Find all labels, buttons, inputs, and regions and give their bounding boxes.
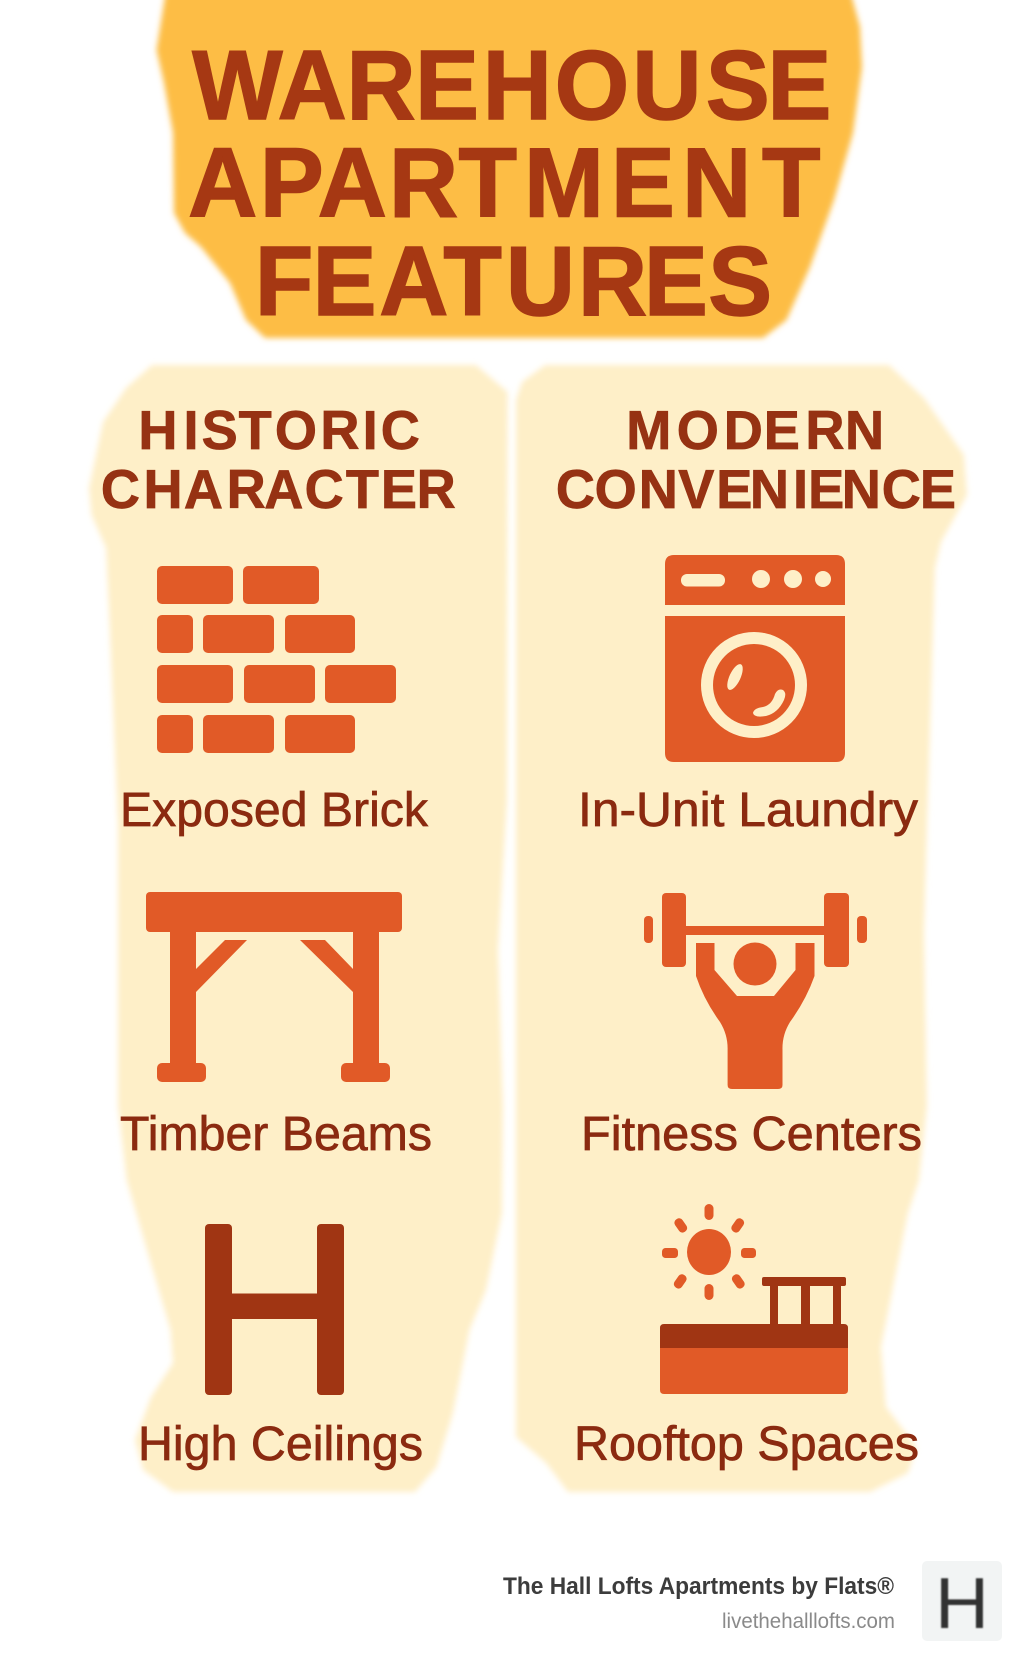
- icon: timber beams: [146, 892, 402, 1082]
- footer brand name: The Hall Lofts Apartments by Flats®: [503, 1573, 894, 1600]
- heading: modern convenience: MODERN: [626, 400, 884, 461]
- heading: historic character: CHARACTER: [101, 459, 456, 520]
- title text: APARTMENT: [188, 127, 820, 238]
- heading: modern convenience: CONVENIENCE: [556, 459, 956, 520]
- footer url: livethehalllofts.com: [722, 1610, 895, 1633]
- icon: brick wall: [157, 566, 396, 753]
- label: fitness centers: Fitness Centers: [581, 1108, 922, 1161]
- footer logo: [922, 1561, 1002, 1644]
- icon: fitness: [644, 893, 867, 1089]
- panel background left: [89, 365, 508, 1492]
- footer logo: H: [935, 1564, 989, 1644]
- label: timber beams: Timber Beams: [120, 1108, 432, 1161]
- heading: historic character: [101, 400, 456, 520]
- title text: FEATURES: [255, 226, 772, 336]
- banner background: [156, 0, 862, 338]
- icon: rooftop: [660, 1204, 848, 1394]
- panel background right: [516, 365, 967, 1492]
- label: high ceilings: High Ceilings: [138, 1418, 423, 1471]
- panel: historic character: [89, 365, 508, 1492]
- title text: WAREHOUSE: [192, 30, 831, 140]
- label: rooftop spaces: Rooftop Spaces: [574, 1418, 919, 1471]
- footer: [503, 1561, 1002, 1644]
- icon: washing machine: [665, 555, 845, 762]
- heading: historic character: HISTORIC: [138, 400, 420, 461]
- label: exposed brick: Exposed Brick: [120, 784, 429, 837]
- panel: modern convenience: [516, 365, 967, 1492]
- label: in-unit laundry: In-Unit Laundry: [578, 784, 918, 837]
- icon: high ceilings: [205, 1224, 344, 1395]
- title banner: [156, 0, 862, 338]
- heading: modern convenience: [556, 400, 956, 520]
- title text: [188, 30, 831, 336]
